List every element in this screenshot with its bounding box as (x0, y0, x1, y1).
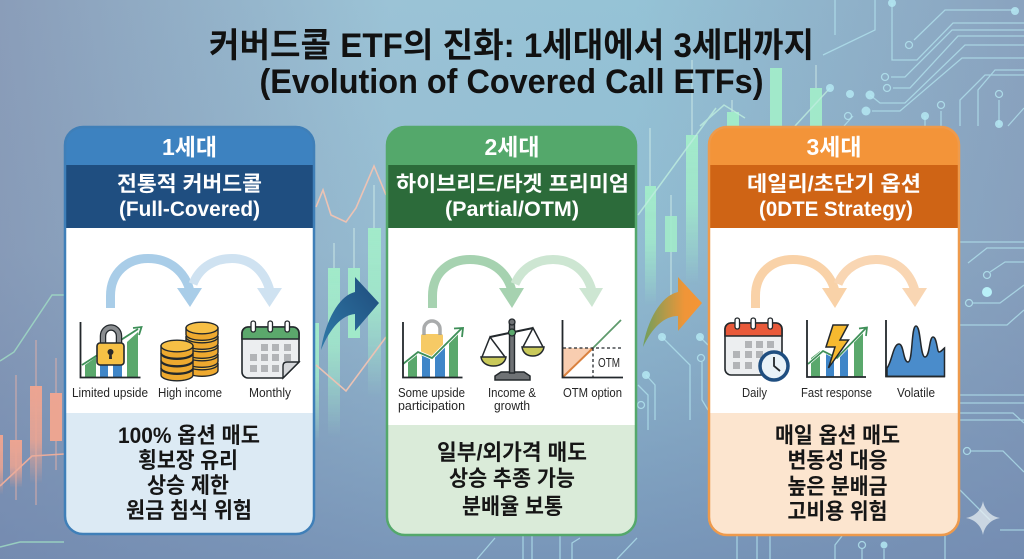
icon labels: Daily (742, 386, 768, 400)
title (209, 27, 814, 101)
icon labels: Some upside (398, 386, 465, 400)
panel: generation 2 (386, 126, 637, 536)
subheading: full-covered: (Full-Covered) (119, 198, 260, 221)
text block: features (775, 423, 900, 524)
panel: generation 1 (64, 126, 315, 535)
subheading: full-covered (117, 173, 262, 221)
icon labels: Volatile (897, 386, 935, 400)
text block: features: 100% 옵션 매도 (118, 423, 260, 448)
icon: daily calendar with clock (725, 318, 788, 380)
subheading: 0DTE: 데일리/초단기 옵션 (747, 173, 921, 196)
icon: OTM payoff diagram: OTM (598, 356, 620, 370)
text block: features: 매일 옵션 매도 (775, 423, 900, 448)
arrow: generation 1 to 2 (321, 277, 379, 350)
icon: monthly calendar (242, 321, 299, 378)
panel: generation 3 (708, 126, 960, 536)
text block: features: 변동성 대응 (788, 448, 888, 473)
curved arrows (432, 260, 603, 308)
icon labels (742, 386, 935, 400)
icon labels: Limited upside (72, 386, 148, 400)
title: (Evolution of Covered Call ETFs) (260, 63, 764, 101)
subheading: 0DTE: (0DTE Strategy) (759, 198, 913, 221)
icon labels: Monthly (249, 386, 292, 400)
curved arrows (110, 258, 282, 308)
icon: OTM payoff diagram (562, 320, 623, 378)
icon: fast response chart with lightning (807, 320, 867, 377)
icon labels (398, 386, 622, 413)
subheading: full-covered: 전통적 커버드콜 (117, 173, 262, 196)
text block: features: 고비용 위험 (788, 499, 888, 524)
icon labels: OTM option (563, 386, 622, 400)
text block: features: 원금 침식 위험 (126, 498, 252, 523)
icon labels: Fast response (801, 386, 872, 400)
text block: features: 높은 분배금 (788, 474, 888, 499)
icon labels (72, 386, 292, 400)
heading: 2세대: 2세대 (484, 134, 540, 160)
title: 커버드콜 ETF의 진화: 1세대에서 3세대까지 (209, 27, 814, 65)
subheading: partial/OTM: 하이브리드/타겟 프리미엄 (396, 173, 629, 196)
heading: 3세대: 3세대 (806, 134, 862, 160)
text block: features (118, 423, 260, 523)
heading: 1세대: 1세대 (162, 134, 217, 160)
icon labels: growth (494, 399, 530, 413)
text block: features: 일부/외가격 매도 (437, 440, 587, 465)
text block: features: 횡보장 유리 (138, 448, 238, 473)
icon labels: Income & (488, 386, 537, 400)
icon: limited upside chart with lock (80, 322, 142, 378)
icon: balance scale (481, 319, 544, 380)
arrow: generation 2 to 3 (643, 277, 702, 347)
text block: features: 분배율 보통 (462, 494, 563, 519)
text block: features (437, 440, 587, 519)
curved arrows (756, 260, 927, 308)
icon: volatile area chart (886, 320, 945, 376)
icon labels: High income (158, 386, 222, 400)
text block: features: 상승 제한 (147, 473, 229, 498)
icon: upside participation chart (403, 321, 463, 378)
text block: features: 상승 추종 가능 (449, 466, 575, 491)
icon: coin stacks (161, 322, 218, 381)
icon: sparkle star (966, 501, 1000, 535)
icon labels: participation (398, 399, 465, 413)
subheading: 0DTE (747, 173, 921, 221)
subheading: partial/OTM (396, 173, 629, 221)
subheading: partial/OTM: (Partial/OTM) (445, 198, 579, 221)
